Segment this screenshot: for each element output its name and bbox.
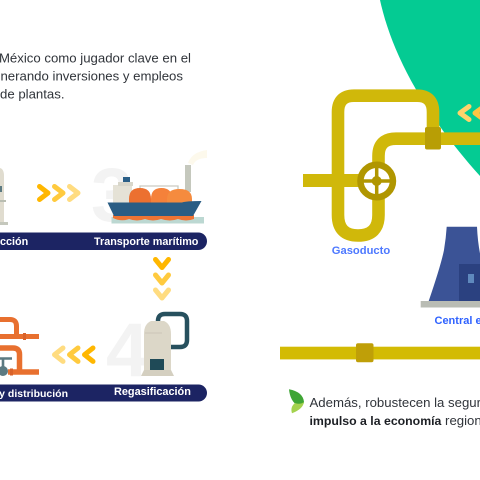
intro text block bbox=[0, 50, 191, 102]
label bar: distribution and regasification: y distribución bbox=[0, 388, 68, 400]
green background shape bbox=[380, 0, 480, 176]
label: Gasoducto: Gasoducto bbox=[332, 245, 390, 257]
label bar: liquefaction and maritime transport: Transporte marítimo bbox=[94, 236, 199, 248]
icon: gas pipeline with valve bbox=[303, 96, 480, 236]
label bar: distribution and regasification: Regasificación bbox=[114, 386, 191, 398]
step 5 icon: distribution pipes bbox=[0, 320, 39, 376]
step 3 icon: LNG ship bbox=[108, 150, 207, 224]
ghost number 4: 4 bbox=[106, 308, 148, 393]
arrow: step 2 to step 3 bbox=[40, 186, 78, 200]
label bar: liquefaction and maritime transport: cción bbox=[0, 236, 28, 248]
label bar: liquefaction and maritime transport bbox=[0, 232, 207, 250]
arrow: step 4 to step 5 bbox=[54, 348, 93, 361]
arrow: step 3 to step 4 bbox=[156, 260, 168, 298]
step 4 icon: regasification tank bbox=[141, 314, 187, 376]
icon: green leaves bbox=[289, 389, 304, 413]
label bar: distribution and regasification bbox=[0, 384, 207, 402]
ghost number 3: 3 bbox=[91, 153, 133, 238]
step 2 icon: liquefaction tower bbox=[0, 168, 8, 225]
intro text block: de plantas. bbox=[0, 86, 65, 102]
arrow: flow into gas pipeline bbox=[460, 106, 480, 120]
closing text block bbox=[310, 395, 480, 428]
intro text block: México como jugador clave en el bbox=[0, 50, 191, 66]
icon: power plant bbox=[421, 227, 480, 308]
intro text block: nerando inversiones y empleos bbox=[0, 68, 183, 84]
lower pipeline bbox=[280, 343, 480, 362]
